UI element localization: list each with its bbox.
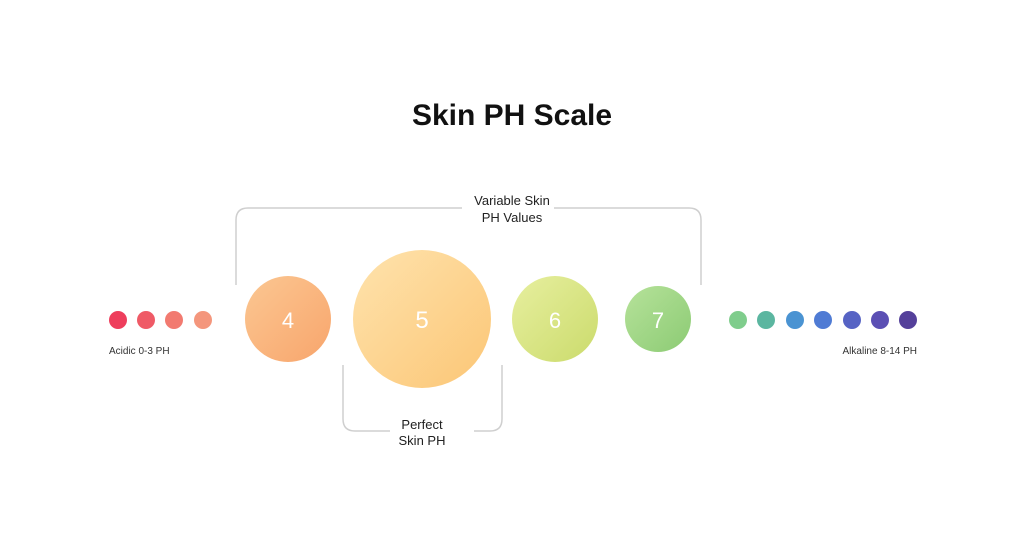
circle 6: 6 bbox=[549, 308, 561, 333]
circle 7 bbox=[625, 286, 691, 352]
acidic dots bbox=[109, 311, 212, 329]
label: variable skin ph values: PH Values bbox=[482, 210, 543, 225]
bracket: perfect skin ph bbox=[343, 365, 502, 431]
circle 6 bbox=[512, 276, 598, 362]
circle 5 bbox=[353, 250, 491, 388]
circle 4 bbox=[245, 276, 331, 362]
alkaline dots bbox=[729, 311, 917, 329]
label: alkaline: Alkaline 8-14 PH bbox=[843, 346, 917, 357]
bracket: variable skin ph bbox=[236, 208, 701, 285]
circle 4: 4 bbox=[282, 308, 294, 333]
label: acidic: Acidic 0-3 PH bbox=[109, 346, 170, 357]
label: variable skin ph values: Variable Skin bbox=[474, 193, 550, 208]
circle 5: 5 bbox=[415, 307, 429, 334]
circle 7: 7 bbox=[652, 308, 664, 333]
label: perfect skin ph: Perfect bbox=[401, 417, 443, 432]
label: perfect skin ph: Skin PH bbox=[399, 433, 445, 448]
title: Skin PH Scale bbox=[412, 99, 612, 132]
